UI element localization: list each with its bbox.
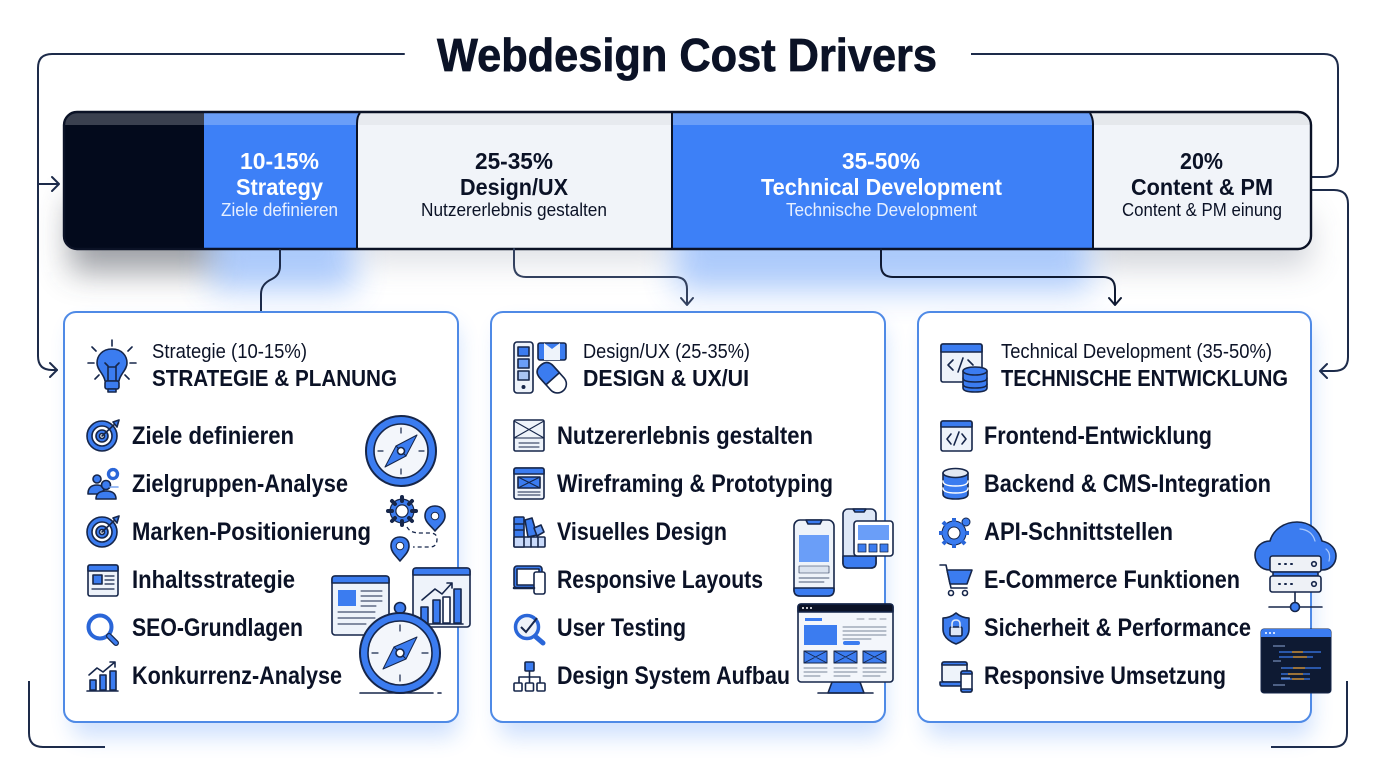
bar shadow <box>70 200 1310 290</box>
bar label: content <box>1122 148 1282 220</box>
heading: technical: Technical Development (35-50%) <box>1001 341 1272 363</box>
list item: Responsive Umsetzung: Responsive Umsetzung <box>984 662 1226 690</box>
panel: design <box>491 312 893 722</box>
bar label: content: Content & PM einung <box>1122 200 1282 220</box>
arrow: technical to panel <box>881 249 1121 305</box>
heading: strategie <box>152 341 397 391</box>
illustration: analytics window <box>413 568 470 627</box>
bar label: design: Nutzererlebnis gestalten <box>421 200 607 220</box>
list item: Design System Aufbau: Design System Aufbau <box>557 662 790 690</box>
segment: strategy <box>204 112 362 249</box>
bar label: technical: Technical Development <box>761 174 1002 200</box>
arrow: strategy to panel <box>261 249 280 312</box>
segment: content <box>1090 112 1311 249</box>
title: Webdesign Cost Drivers <box>437 29 937 81</box>
list item: Visuelles Design <box>514 517 727 547</box>
illustration: phone and tablet <box>843 509 893 568</box>
panel: technical <box>918 312 1336 722</box>
illustration: cloud server <box>1255 522 1336 612</box>
icon: code window and database <box>941 344 987 392</box>
bar label: strategy: Ziele definieren <box>221 200 338 220</box>
list item: API-Schnittstellen: API-Schnittstellen <box>984 518 1173 546</box>
bar label: design: 25-35% <box>475 148 553 174</box>
segment: design <box>357 112 672 249</box>
corner bracket: bottom right <box>1271 681 1347 747</box>
heading: strategie: Strategie (10-15%) <box>152 341 307 363</box>
list item: Visuelles Design: Visuelles Design <box>557 518 727 546</box>
panel: strategie <box>64 312 470 722</box>
list item: Nutzererlebnis gestalten: Nutzererlebnis gestalten <box>557 422 813 450</box>
heading: technical: TECHNISCHE ENTWICKLUNG <box>1001 365 1288 391</box>
illustration: phone <box>794 520 834 596</box>
list item: Ziele definieren <box>87 420 294 451</box>
bar label: strategy: 10-15% <box>240 148 319 174</box>
illustration: gear and route pins <box>388 497 445 561</box>
list item: Frontend-Entwicklung <box>941 421 1212 451</box>
list item: Inhaltsstrategie: Inhaltsstrategie <box>132 566 295 594</box>
list item: Zielgruppen-Analyse: Zielgruppen-Analyse <box>132 470 348 498</box>
list item: Wireframing & Prototyping: Wireframing & Prototyping <box>557 470 833 498</box>
heading: design <box>583 341 750 391</box>
list item: Marken-Positionierung <box>87 516 371 547</box>
heading: design: Design/UX (25-35%) <box>583 341 750 363</box>
list item: SEO-Grundlagen: SEO-Grundlagen <box>132 614 303 642</box>
heading: design: DESIGN & UX/UI <box>583 365 749 391</box>
corner bracket: bottom left <box>29 681 105 747</box>
list item: SEO-Grundlagen <box>88 614 303 643</box>
arrow: design to panel <box>514 249 693 305</box>
list item: Ziele definieren: Ziele definieren <box>132 422 294 450</box>
segment: dark <box>64 112 205 249</box>
illustration: code window <box>1261 629 1331 693</box>
bar label: strategy: Strategy <box>236 174 323 200</box>
connector: title left bracket to strategy panel <box>38 54 404 377</box>
list item: User Testing: User Testing <box>557 614 686 642</box>
icon: light bulb <box>88 340 136 392</box>
list item: Responsive Layouts: Responsive Layouts <box>557 566 763 594</box>
illustration: desktop monitor <box>798 604 893 693</box>
heading: technical <box>1001 341 1288 391</box>
panel shadows <box>72 325 1312 737</box>
bar label: design <box>421 148 607 220</box>
list item: Responsive Umsetzung <box>940 662 1226 692</box>
stacked cost bar <box>64 112 1311 249</box>
list item: Sicherheit & Performance: Sicherheit & Performance <box>984 614 1251 642</box>
bar label: technical: 35-50% <box>842 148 920 174</box>
icon: design tools <box>514 342 570 397</box>
illustration: content window <box>332 576 389 635</box>
heading: strategie: STRATEGIE & PLANUNG <box>152 365 397 391</box>
bar label: content: Content & PM <box>1131 174 1273 200</box>
list item: Inhaltsstrategie <box>88 565 295 596</box>
bar label: content: 20% <box>1180 148 1223 174</box>
bar label: technical: Technische Development <box>786 200 977 220</box>
connector: content segment to technical panel <box>1311 190 1348 378</box>
bar label: strategy <box>221 148 338 220</box>
list item: Wireframing & Prototyping <box>514 468 833 499</box>
illustration: compass <box>366 416 436 486</box>
list item: Frontend-Entwicklung: Frontend-Entwicklung <box>984 422 1212 450</box>
list item: E-Commerce Funktionen: E-Commerce Funktionen <box>984 566 1240 594</box>
connector: title right bracket to content segment <box>971 54 1338 177</box>
list item: Konkurrenz-Analyse: Konkurrenz-Analyse <box>132 662 342 690</box>
list item: E-Commerce Funktionen <box>940 565 1240 596</box>
illustration: stopwatch compass <box>360 602 441 693</box>
list item: User Testing <box>516 614 686 643</box>
list item: Backend & CMS-Integration: Backend & CMS-Integration <box>984 470 1271 498</box>
bar label: technical <box>761 148 1002 220</box>
bar label: design: Design/UX <box>460 174 569 200</box>
list item: API-Schnittstellen <box>939 518 1173 548</box>
segment: technical <box>672 112 1093 249</box>
list item: Marken-Positionierung: Marken-Positionierung <box>132 518 371 546</box>
